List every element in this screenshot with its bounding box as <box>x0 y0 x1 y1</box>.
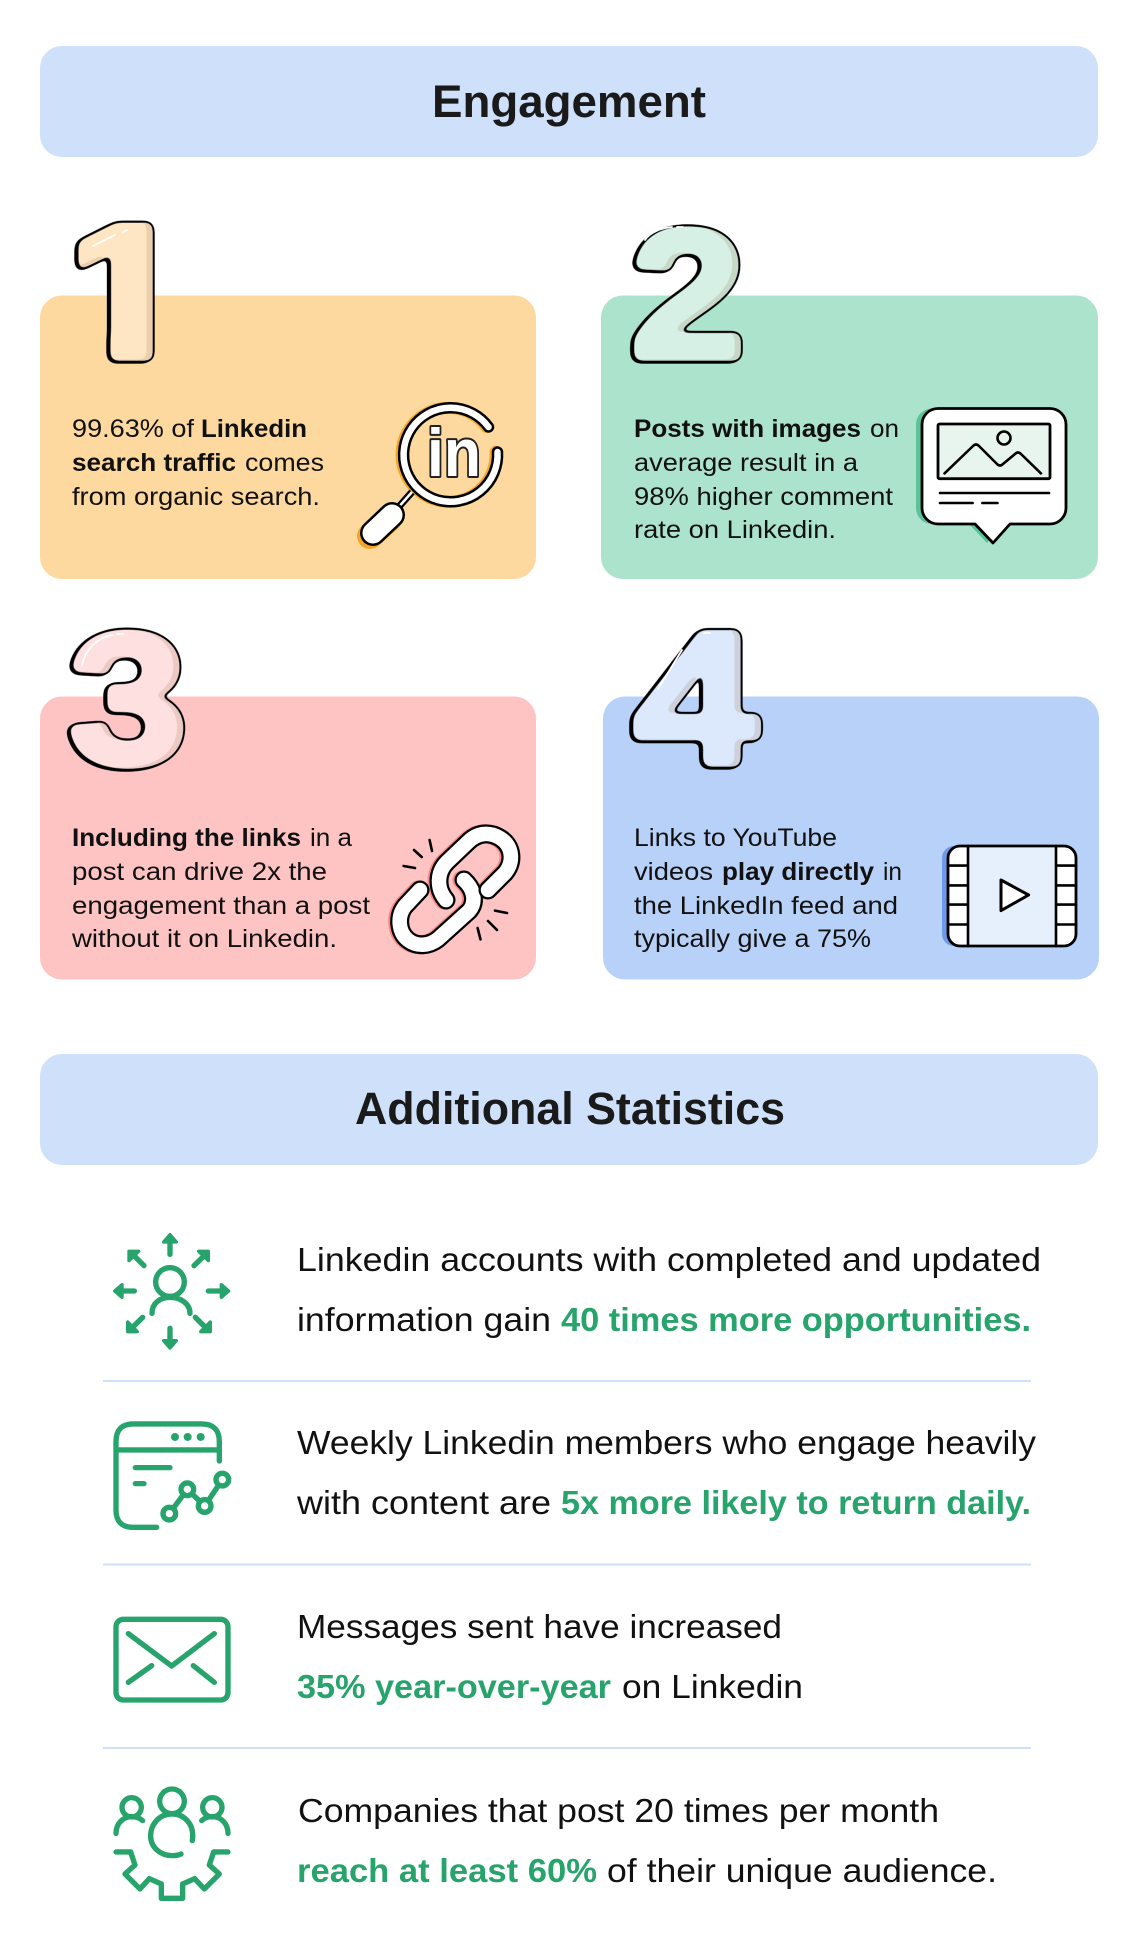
icon: browser with chart <box>116 1424 229 1527</box>
panel: card 3 links <box>40 596 536 980</box>
text: opportunities: Linkedin accounts with completed and updated <box>297 1241 1041 1278</box>
text: organic search traffic: comes <box>245 449 324 477</box>
text: links engagement: without it on Linkedin. <box>71 925 337 953</box>
panel: card 4 YouTube links <box>603 593 1099 980</box>
text: images comment rate: rate on Linkedin. <box>634 516 836 544</box>
stat row: return daily <box>116 1424 1037 1527</box>
icon: chain link <box>398 834 511 945</box>
text: organic search traffic: 99.63% of <box>72 415 194 443</box>
text: YouTube videos: play directly <box>722 858 874 886</box>
icon: LinkedIn magnifier <box>370 408 498 536</box>
text: messages: 35% year-over-year <box>297 1668 611 1705</box>
heading: Engagement: Engagement <box>432 76 706 127</box>
text: messages: on Linkedin <box>622 1668 803 1705</box>
icon: people and gear <box>116 1789 228 1898</box>
icon: film strip play <box>942 846 1076 946</box>
text: images comment rate: 98% higher comment <box>634 483 893 511</box>
text: messages: Messages sent have increased <box>297 1608 782 1645</box>
number 2: 2 <box>631 192 745 396</box>
text: opportunities: information gain <box>297 1301 551 1338</box>
stat row: companies <box>116 1789 997 1898</box>
text: organic search traffic <box>72 415 324 511</box>
text: companies: Companies that post 20 times per month <box>298 1792 939 1829</box>
icon: image speech bubble <box>916 408 1066 543</box>
text: links engagement: Including the links <box>72 824 301 852</box>
text: YouTube videos: videos <box>634 858 713 886</box>
text: companies: of their unique audience. <box>607 1852 997 1889</box>
text: return daily: with content are <box>296 1484 551 1521</box>
icon: person with arrows <box>115 1235 229 1348</box>
stat row: messages <box>116 1608 803 1705</box>
icon: envelope <box>116 1619 228 1700</box>
panel: card 2 posts with images <box>601 192 1098 579</box>
text: organic search traffic: from organic search. <box>72 483 320 511</box>
stat row: opportunities <box>115 1235 1041 1348</box>
text: return daily: Weekly Linkedin members who engage heavily <box>297 1424 1037 1461</box>
heading: Engagement <box>40 46 1098 157</box>
panel: card 1 organic search <box>40 186 536 579</box>
heading: Additional Statistics <box>40 1054 1098 1165</box>
text: YouTube videos: Links to YouTube <box>634 824 837 852</box>
text: images comment rate: average result in a <box>634 449 858 477</box>
text: companies <box>297 1792 997 1889</box>
text: links engagement: post can drive 2x the <box>72 858 327 886</box>
text: links engagement <box>71 824 370 953</box>
text: return daily: 5x more likely to return daily. <box>561 1484 1031 1521</box>
text: companies: reach at least 60% <box>297 1852 597 1889</box>
text: opportunities <box>297 1241 1041 1338</box>
number 3: 3 <box>69 596 187 803</box>
text: images comment rate <box>634 415 899 544</box>
text: messages <box>297 1608 803 1705</box>
text: opportunities: 40 times more opportunities. <box>561 1301 1031 1338</box>
text: return daily <box>296 1424 1037 1521</box>
icon: LinkedIn magnifier: in <box>427 415 481 491</box>
text: YouTube videos: typically give a 75% <box>634 925 871 953</box>
text: YouTube videos <box>634 824 902 953</box>
text: links engagement: engagement than a post <box>72 892 370 920</box>
text: organic search traffic: Linkedin <box>201 415 307 443</box>
text: YouTube videos: in <box>883 858 902 886</box>
text: organic search traffic: search traffic <box>72 449 236 477</box>
text: YouTube videos: the LinkedIn feed and <box>634 892 898 920</box>
text: images comment rate: on <box>870 415 899 443</box>
text: images comment rate: Posts with images <box>634 415 861 443</box>
heading: Additional Statistics: Additional Statistics <box>355 1083 785 1134</box>
number 4: 4 <box>634 593 758 803</box>
text: links engagement: in a <box>310 824 352 852</box>
number 1: 1 <box>58 186 195 398</box>
